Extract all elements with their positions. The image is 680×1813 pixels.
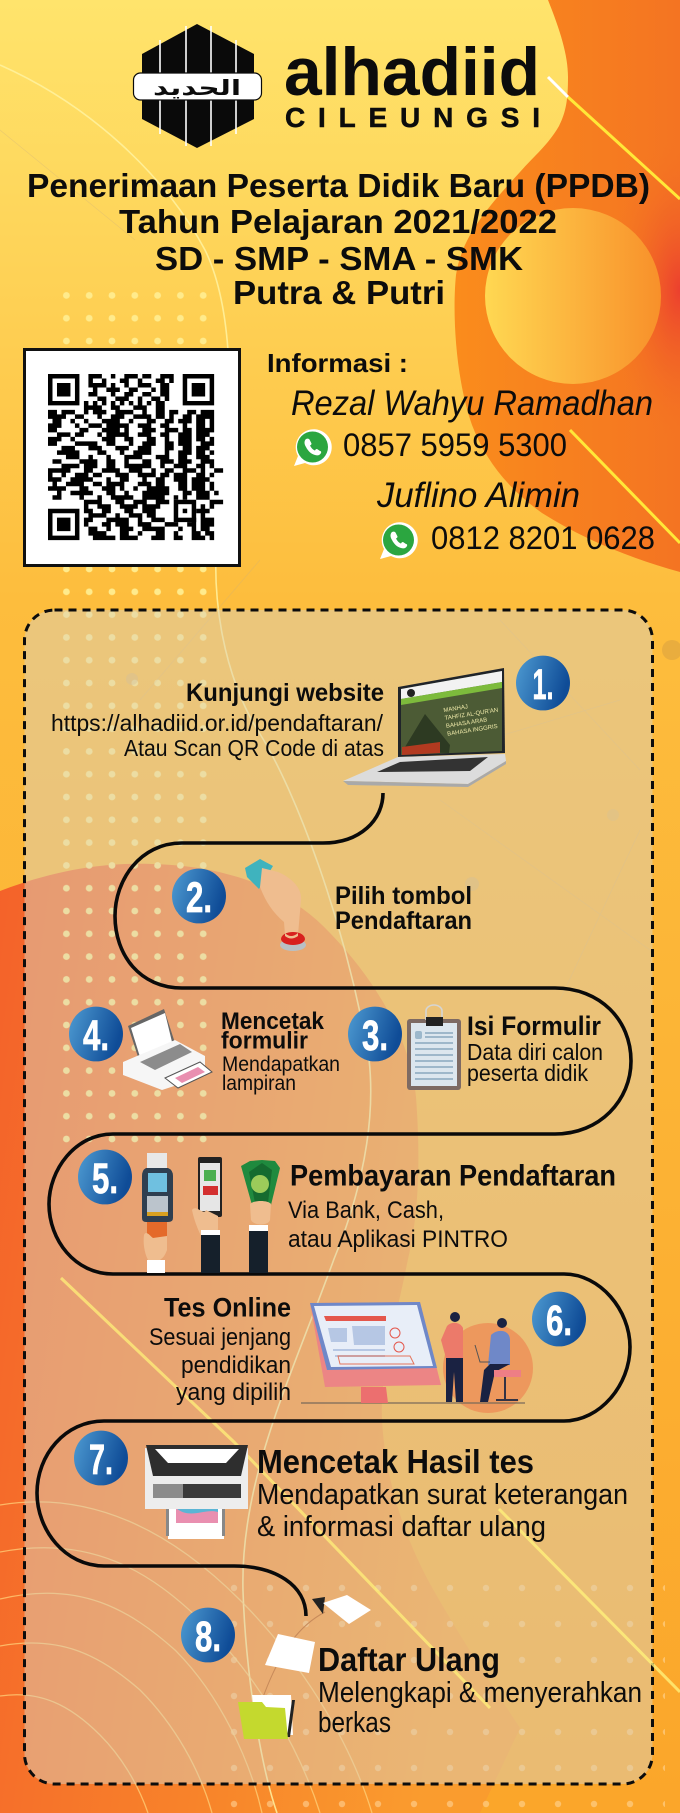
step 5 text: atau Aplikasi PINTRO [288, 1226, 508, 1253]
step 8 [181, 1595, 642, 1739]
badge 8: 8. [195, 1613, 221, 1661]
badge 1: 1. [532, 661, 554, 709]
step 7 [74, 1431, 628, 1543]
icon: laptop: BAHASA INGGRIS [447, 724, 498, 738]
step 6 text: yang dipilih [176, 1379, 291, 1406]
step 4 text: Mencetak [221, 1008, 325, 1035]
badge 1 [516, 656, 570, 710]
step 7 text [257, 1443, 628, 1543]
badge 5 [78, 1150, 132, 1204]
yellow accent lines [548, 77, 680, 543]
icon: laptop: TAHFIZ AL-QUR'AN [444, 708, 499, 722]
logo [134, 24, 540, 148]
contact 2 phone: 0812 8201 0628 [431, 520, 655, 556]
icon: whatsapp 1 [294, 429, 332, 466]
icon: laptop [343, 668, 506, 787]
badge 8 [181, 1608, 235, 1662]
step 6 text: Tes Online [164, 1292, 291, 1322]
logo icon: hexagon [134, 24, 262, 148]
icon: laptop: MANHAJ [443, 704, 468, 714]
step 7 text: Mendapatkan surat keterangan [257, 1479, 628, 1511]
step 1 text [51, 679, 384, 761]
badge 3 [348, 1007, 402, 1061]
badge 6 [532, 1292, 586, 1346]
icon: phone payment [192, 1157, 222, 1273]
step 8 text: berkas [318, 1707, 391, 1739]
step 5 [78, 1150, 616, 1273]
panel: steps (dashed rounded frame) [24, 610, 652, 1784]
QR code [24, 350, 240, 566]
step 1 text: https://alhadiid.or.id/pendaftaran/ [51, 710, 384, 736]
title: SD - SMP - SMA - SMK [155, 240, 523, 277]
badge 7: 7. [89, 1436, 113, 1484]
step 6 text: pendidikan [181, 1352, 291, 1379]
step 1 text: Kunjungi website [186, 679, 384, 707]
step 5 text: Pembayaran Pendaftaran [290, 1160, 616, 1192]
step 8 text: Melengkapi & menyerahkan [318, 1677, 642, 1709]
step 6 text: Sesuai jenjang [149, 1324, 291, 1351]
step 4 text: formulir [221, 1028, 308, 1054]
badge 3: 3. [362, 1012, 388, 1060]
icon: laptop: BAHASA ARAB [446, 717, 488, 730]
logo wordmark: alhadiid [284, 34, 540, 110]
contact information [267, 348, 655, 559]
icon: printer top view [145, 1445, 248, 1539]
step 2 text [335, 882, 472, 935]
icon: flying documents and folder [238, 1595, 371, 1739]
step 1 [51, 656, 570, 787]
logo subtitle: CILEUNGSI [285, 102, 540, 133]
badge 5: 5. [92, 1155, 118, 1203]
step 8 text: Daftar Ulang [318, 1641, 500, 1678]
badge 4 [69, 1007, 123, 1061]
step 3 [348, 1005, 603, 1090]
contact 1 name: Rezal Wahyu Ramadhan [291, 384, 653, 423]
step 2 [172, 859, 472, 951]
step 3 text: Data diri calon [467, 1039, 603, 1065]
badge 2 [172, 869, 226, 923]
step 5 text [288, 1160, 616, 1253]
logo icon: hexagon: الحديد [153, 76, 241, 100]
step 3 text [467, 1011, 603, 1086]
title [27, 167, 650, 311]
icon: card terminal [142, 1153, 173, 1273]
step 4 text [221, 1008, 340, 1095]
step 2 text: Pendaftaran [335, 907, 472, 935]
step 3 text: peserta didik [467, 1060, 588, 1086]
step 3 text: Isi Formulir [467, 1011, 601, 1041]
badge 6: 6. [546, 1297, 572, 1345]
step 8 text [318, 1641, 642, 1739]
step 4 [69, 1007, 340, 1095]
informasi heading: Informasi : [267, 348, 408, 378]
badge 2: 2. [186, 874, 212, 922]
icon: whatsapp 2 [380, 522, 418, 559]
step 7 text: Mencetak Hasil tes [257, 1443, 534, 1480]
icon: printer [123, 1009, 212, 1090]
winding route line [37, 793, 631, 1616]
icon: online test illustration [301, 1302, 533, 1413]
pale diagonal lines over panel [61, 1278, 680, 1708]
contact 2 name: Juflino Alimin [376, 476, 580, 515]
step 4 text: Mendapatkan [222, 1053, 340, 1076]
title: Putra & Putri [233, 274, 445, 311]
icon: cash money [241, 1160, 280, 1273]
step 6 [149, 1292, 586, 1413]
step 7 text: & informasi daftar ulang [257, 1511, 546, 1543]
title: Penerimaan Peserta Didik Baru (PPDB) [27, 167, 650, 204]
badge 7 [74, 1431, 128, 1485]
step 2 text: Pilih tombol [335, 882, 472, 910]
icon: hand pressing button [245, 859, 306, 951]
step 1 text: Atau Scan QR Code di atas [124, 735, 384, 761]
step 5 text: Via Bank, Cash, [288, 1197, 444, 1224]
contact 1 phone: 0857 5959 5300 [343, 427, 567, 463]
title: Tahun Pelajaran 2021/2022 [119, 203, 557, 240]
badge 4: 4. [83, 1012, 109, 1060]
step 6 text [149, 1292, 291, 1406]
icon: clipboard [407, 1005, 461, 1090]
step 4 text: lampiran [222, 1072, 296, 1095]
